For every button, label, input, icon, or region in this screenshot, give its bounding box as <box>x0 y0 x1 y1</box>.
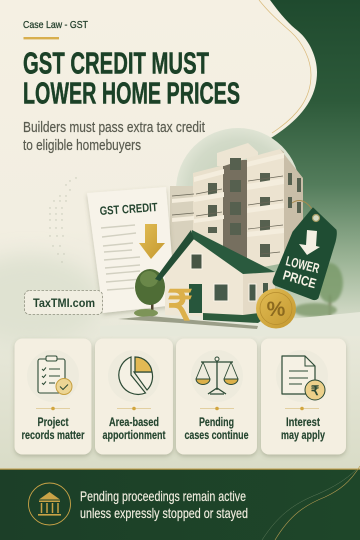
title: LOWER HOME PRICES <box>23 76 240 110</box>
percent coin: % <box>267 298 286 321</box>
title <box>23 46 240 110</box>
green corner backdrop <box>240 0 360 335</box>
card label: Project <box>38 417 69 429</box>
far left wing <box>170 186 194 256</box>
card label <box>102 417 166 442</box>
website badge: TaxTMI.com <box>33 296 95 310</box>
soft wash lower left <box>0 255 100 345</box>
subtitle: Builders must pass extra tax credit <box>23 119 206 136</box>
icon: pie chart <box>108 350 160 402</box>
front wall <box>165 238 243 318</box>
price tag <box>273 201 336 300</box>
right block <box>247 149 290 270</box>
card label: Interest <box>286 417 320 429</box>
tower top <box>217 143 258 166</box>
tag text: LOWER <box>284 253 321 276</box>
card: interest <box>261 338 346 454</box>
card label: Pending <box>199 417 234 429</box>
divider <box>285 408 319 410</box>
left block <box>193 165 224 270</box>
title: GST CREDIT MUST <box>23 46 209 80</box>
tag text: PRICE <box>281 267 318 291</box>
subtitle: to eligible homebuyers <box>23 137 141 154</box>
window side <box>249 284 256 301</box>
side wall <box>243 272 275 318</box>
icon: clipboard <box>27 350 79 402</box>
down arrow <box>139 224 165 259</box>
card label: cases continue <box>184 430 248 442</box>
house <box>155 230 275 323</box>
gold accent rule <box>24 37 59 39</box>
subtitle <box>23 119 206 154</box>
base band <box>203 311 275 323</box>
card label: may apply <box>281 430 325 442</box>
balcony rails <box>172 176 283 254</box>
tag hole <box>312 214 320 222</box>
central recess <box>223 160 248 272</box>
right side wall <box>280 149 303 262</box>
card: project records <box>14 338 92 454</box>
card: pending cases <box>176 338 257 454</box>
tag text <box>281 253 321 291</box>
apartment building <box>170 143 303 272</box>
window lower <box>214 284 228 301</box>
halo behind building <box>176 128 300 252</box>
halftone dots <box>49 177 77 263</box>
card: area-based <box>95 338 173 454</box>
windows <box>208 158 301 257</box>
card label: records matter <box>22 430 85 442</box>
card label: Area-based <box>109 417 159 429</box>
divider <box>200 408 234 410</box>
card label <box>184 417 248 442</box>
tree right <box>293 263 343 317</box>
footer text: Pending proceedings remain active <box>80 488 246 504</box>
roof left slope <box>155 230 194 281</box>
balcony slabs <box>172 153 284 237</box>
footer text: unless expressly stopped or stayed <box>80 505 248 521</box>
door <box>189 284 202 313</box>
card label: apportionment <box>102 430 166 442</box>
footer curves <box>275 466 360 540</box>
window upper <box>191 254 202 269</box>
website badge <box>24 290 102 314</box>
roof <box>192 230 275 274</box>
rupee symbol: ₹ <box>167 282 193 329</box>
tag string <box>292 201 316 218</box>
icon: courthouse <box>28 483 70 525</box>
card label <box>22 417 85 442</box>
icon: scales <box>191 350 243 402</box>
document heading: GST CREDIT <box>99 200 159 218</box>
tag arrow <box>299 230 320 255</box>
footer text <box>80 488 248 521</box>
eyebrow label: Case Law - GST <box>23 19 88 31</box>
tree left <box>134 269 165 317</box>
gold curve line <box>259 0 311 133</box>
tag body <box>273 208 336 300</box>
paper <box>87 187 176 313</box>
divider <box>36 408 70 410</box>
ground <box>100 312 360 336</box>
GST credit document <box>87 187 176 313</box>
card label <box>281 417 325 442</box>
percent coin <box>256 288 296 328</box>
divider <box>117 408 151 410</box>
window side small <box>263 283 268 293</box>
icon: document with rupee: ₹ <box>311 383 320 398</box>
document lines <box>101 225 142 290</box>
footer band <box>0 466 360 540</box>
